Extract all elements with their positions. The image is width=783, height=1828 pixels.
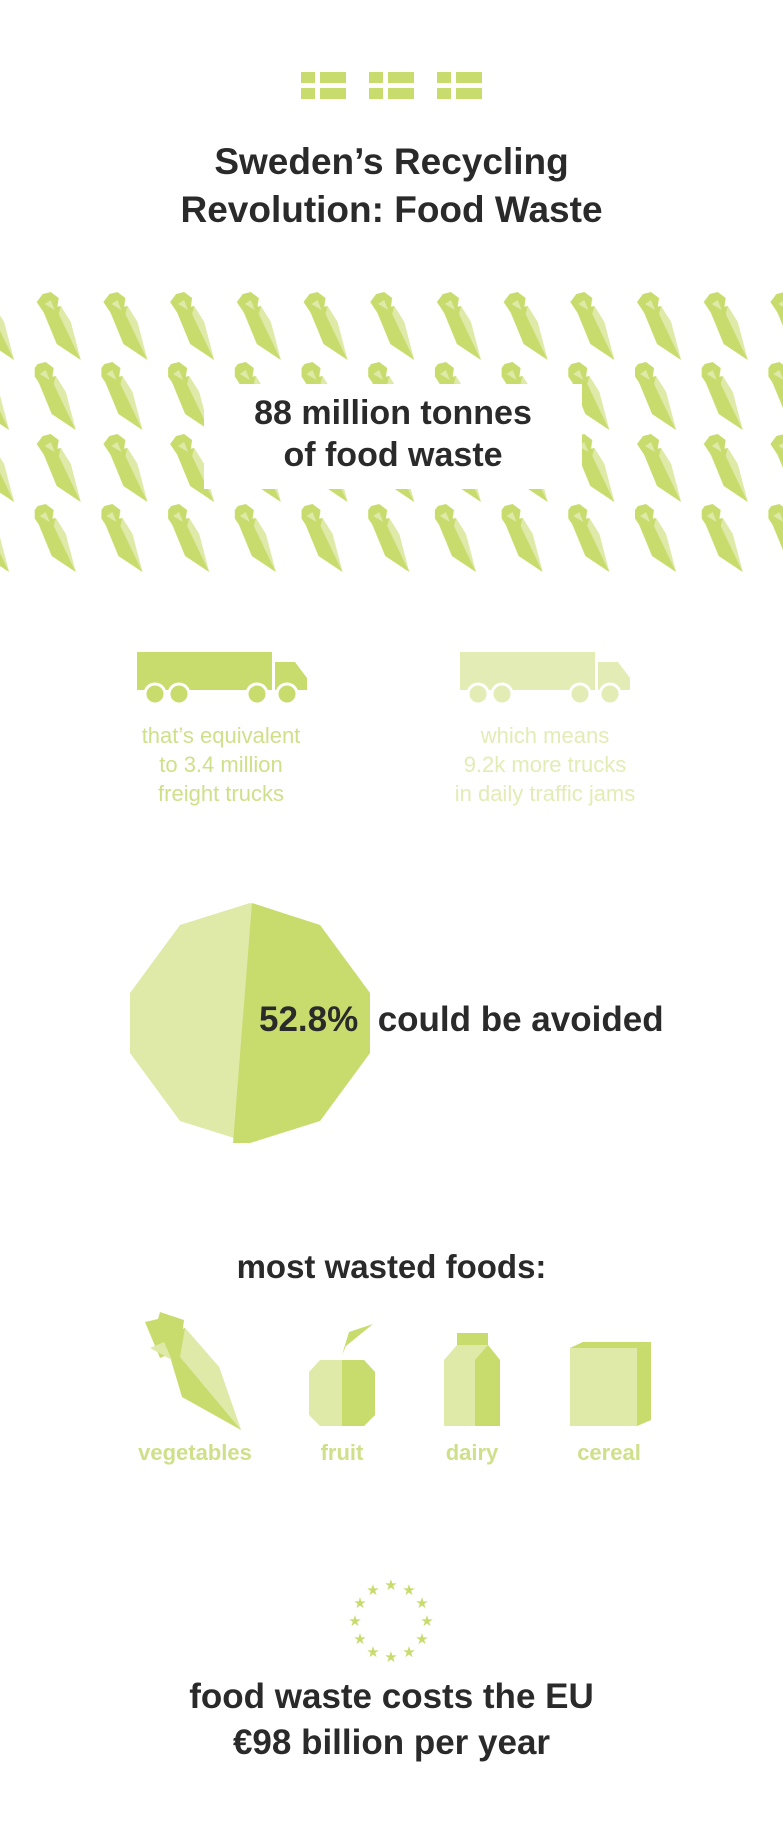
- icon: EU stars: [348, 1577, 434, 1666]
- icon: EU stars: ★: [353, 1631, 367, 1648]
- text: traffic jams: 9.2k more trucks: [464, 752, 626, 777]
- icon: EU stars: ★: [366, 1582, 380, 1599]
- icons: foods: [145, 1312, 651, 1430]
- title: Revolution: Food Waste: [180, 189, 603, 230]
- icon: EU stars: ★: [415, 1595, 429, 1612]
- text: EU cost: food waste costs the EU: [189, 1677, 594, 1716]
- text: EU cost: [189, 1677, 594, 1762]
- title: Sweden’s Recycling: [214, 141, 569, 182]
- icon: EU stars: ★: [366, 1644, 380, 1661]
- text: traffic jams: [455, 723, 635, 806]
- icon: EU stars: ★: [384, 1577, 398, 1594]
- labels: foods: [138, 1440, 641, 1465]
- text: trucks equivalent: [142, 723, 300, 806]
- icon: fruit: [309, 1324, 375, 1426]
- text: trucks equivalent: that’s equivalent: [142, 723, 300, 748]
- carrot pattern band: [0, 292, 783, 572]
- text: 52.8% could be avoided: 52.8% could be avoided: [259, 1000, 664, 1039]
- callout: 88 million tonnes: [204, 384, 582, 489]
- title: [180, 141, 603, 230]
- icon: flags: [301, 72, 482, 99]
- icon: truck left: [137, 652, 307, 702]
- text: traffic jams: which means: [481, 723, 609, 748]
- icon: truck right: [460, 652, 630, 702]
- icon: dairy: [444, 1333, 500, 1426]
- icon: EU stars: ★: [384, 1649, 398, 1666]
- icon: EU stars: ★: [348, 1613, 362, 1630]
- icon: EU stars: ★: [402, 1582, 416, 1599]
- text: trucks equivalent: to 3.4 million: [159, 752, 283, 777]
- labels: foods: dairy: [446, 1440, 498, 1465]
- icon: EU stars: ★: [415, 1631, 429, 1648]
- icon: cereal: [570, 1342, 651, 1426]
- icon: EU stars: ★: [353, 1595, 367, 1612]
- text: traffic jams: in daily traffic jams: [455, 781, 635, 806]
- text: EU cost: €98 billion per year: [233, 1723, 550, 1762]
- callout: 88 million tonnes: of food waste: [283, 436, 503, 474]
- icon: EU stars: ★: [402, 1644, 416, 1661]
- labels: foods: vegetables: [138, 1440, 252, 1465]
- callout: 88 million tonnes: 88 million tonnes: [254, 394, 532, 432]
- labels: foods: cereal: [577, 1440, 641, 1465]
- pie chart: [130, 903, 370, 1143]
- icon: EU stars: ★: [420, 1613, 434, 1630]
- icon: vegetables: [145, 1312, 241, 1430]
- heading: most wasted foods: most wasted foods:: [237, 1248, 546, 1285]
- labels: foods: fruit: [321, 1440, 363, 1465]
- text: trucks equivalent: freight trucks: [158, 781, 284, 806]
